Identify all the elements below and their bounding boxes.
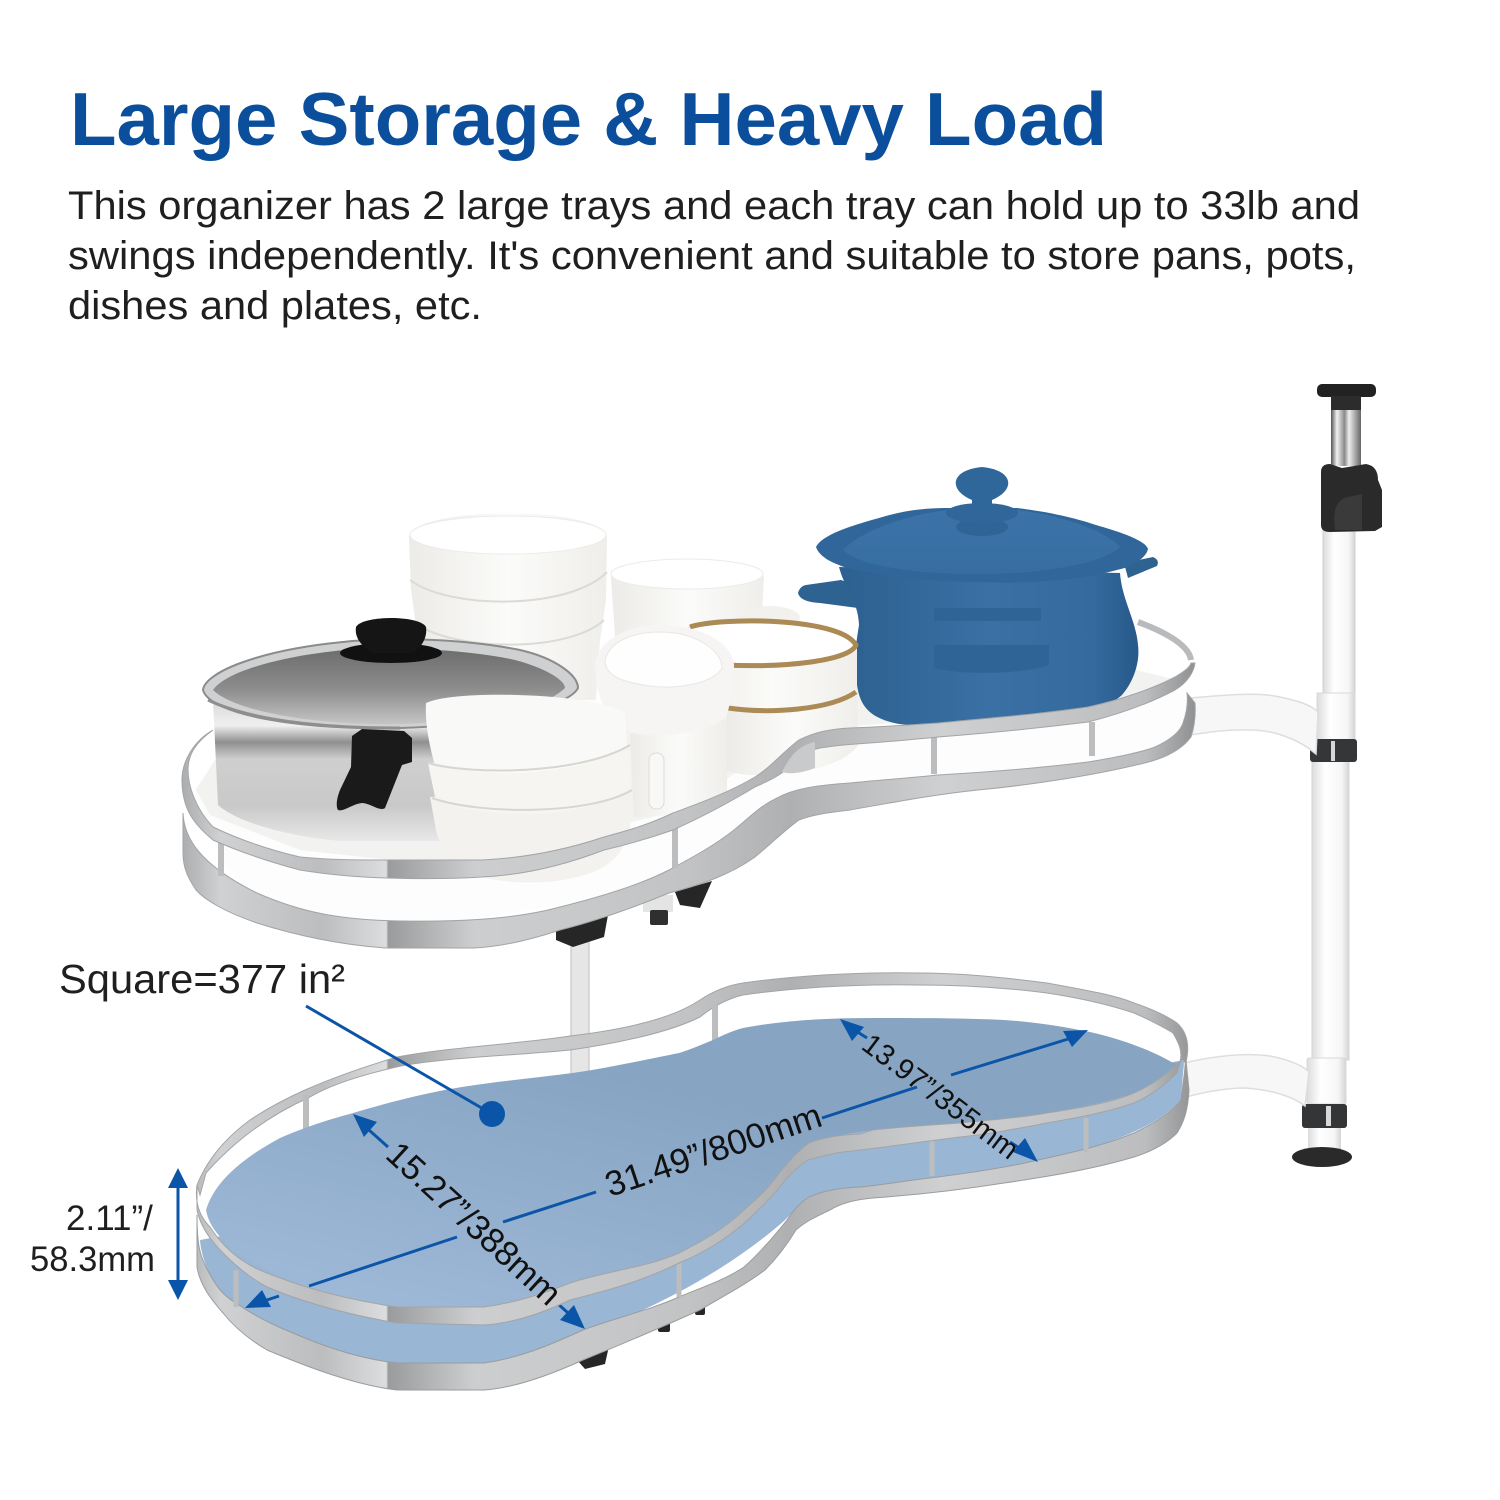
mug handle bbox=[649, 753, 664, 809]
gold rim bowls bbox=[688, 620, 858, 775]
bottom bowl bbox=[430, 790, 632, 882]
rear cup bbox=[611, 558, 764, 650]
lower rim band bbox=[197, 1060, 1189, 1390]
tilted cup bbox=[595, 625, 734, 735]
width arrow bottom left bbox=[560, 1305, 585, 1329]
width label right: 13.97”/355mm bbox=[856, 1028, 1024, 1166]
support pole bbox=[1292, 384, 1382, 1167]
blue pot bbox=[798, 467, 1158, 727]
lid dome bbox=[843, 510, 1120, 574]
callout leader bbox=[306, 1006, 492, 1114]
lower collar bbox=[1302, 1104, 1347, 1128]
rail band bbox=[182, 663, 1195, 879]
width arrow bottom right bbox=[1013, 1138, 1038, 1162]
small white dish behind bbox=[740, 606, 800, 630]
body reflections bbox=[934, 608, 1049, 673]
black clamp bbox=[1321, 464, 1382, 532]
center post bbox=[571, 940, 589, 1075]
bottom tube stub bbox=[1308, 1127, 1341, 1153]
description text: This organizer has 2 large trays and each tray can hold up to 33lb and bbox=[68, 184, 1360, 228]
length dimension line bbox=[252, 1036, 1078, 1305]
black handle bbox=[337, 729, 412, 810]
length arrow left bbox=[245, 1290, 271, 1308]
white mug and cup bbox=[595, 625, 734, 817]
back rail bbox=[197, 973, 1188, 1195]
white bolt bbox=[643, 895, 673, 912]
blue surface bbox=[206, 1018, 1181, 1307]
arrowheads bbox=[245, 1019, 1088, 1329]
lid collar bbox=[946, 503, 1018, 523]
steel saucepan bbox=[203, 618, 578, 841]
length label: 31.49”/800mm bbox=[600, 1096, 827, 1205]
pan body bbox=[213, 700, 470, 841]
white tray floor bbox=[186, 666, 1190, 930]
upper sleeve bbox=[1317, 693, 1355, 741]
upper arm bbox=[1190, 694, 1318, 754]
description text bbox=[68, 184, 1360, 328]
lower rim bbox=[728, 692, 856, 711]
upper tray hardware bbox=[556, 881, 712, 947]
chrome curve reflection bbox=[782, 742, 815, 773]
black bearing block bbox=[556, 915, 608, 947]
length arrow right bbox=[1063, 1030, 1088, 1047]
callout dot bbox=[479, 1101, 505, 1127]
height label bbox=[30, 1199, 155, 1279]
lower tray feet bbox=[570, 1305, 705, 1369]
lower arm bbox=[1184, 1055, 1309, 1106]
lid knob bbox=[356, 618, 426, 653]
lid rim bbox=[203, 639, 578, 728]
lid knob bbox=[956, 467, 1008, 512]
top foot cap bbox=[1317, 384, 1376, 410]
upper tray bbox=[183, 622, 1195, 948]
white upper tube bbox=[1323, 530, 1355, 695]
lower sleeve bbox=[1307, 1058, 1346, 1104]
front rail posts bbox=[236, 1118, 1086, 1307]
lower tray bbox=[196, 973, 1189, 1390]
width dimension left bbox=[360, 1122, 578, 1322]
rail posts bbox=[221, 722, 1092, 876]
upper rim bbox=[690, 621, 856, 666]
chrome upper rod bbox=[1331, 410, 1361, 466]
height dimension bbox=[168, 1168, 188, 1300]
width arrow top right bbox=[840, 1019, 864, 1041]
blue side fill bbox=[200, 1060, 1184, 1372]
rear rail end bbox=[1138, 622, 1191, 660]
right handle bbox=[1124, 557, 1158, 578]
front rail band bbox=[196, 1060, 1181, 1325]
bottom foot bbox=[1292, 1147, 1352, 1167]
dimension lines bbox=[252, 1006, 1078, 1322]
width arrow top left bbox=[353, 1114, 377, 1137]
stacked front bowls bbox=[426, 695, 632, 882]
pot body bbox=[839, 567, 1138, 727]
stacked white bowls bbox=[409, 513, 607, 700]
area label: Square=377 in² bbox=[59, 956, 345, 1002]
back rail posts bbox=[306, 1005, 715, 1135]
lower gold bowl bbox=[726, 690, 858, 775]
black bolt bbox=[650, 910, 668, 925]
middle collar bbox=[1310, 739, 1357, 762]
cup opening bbox=[605, 632, 722, 687]
width label left: 15.27”/388mm bbox=[379, 1135, 568, 1313]
width dimension right bbox=[848, 1026, 1030, 1155]
black clip bbox=[675, 881, 712, 908]
rim front line bbox=[208, 700, 400, 728]
top bowl bbox=[426, 695, 627, 773]
floor grey top bbox=[196, 670, 1176, 860]
description text: swings independently. It's convenient and suitable to store pans, pots, bbox=[68, 234, 1356, 278]
height label: 2.11”/ bbox=[66, 1199, 153, 1238]
upper tray rail bbox=[182, 663, 1195, 879]
mid bowl bbox=[428, 750, 630, 814]
title: Large Storage & Heavy Load bbox=[70, 77, 1107, 161]
upper gold bowl bbox=[688, 620, 857, 709]
height label: 58.3mm bbox=[30, 1240, 155, 1279]
description text: dishes and plates, etc. bbox=[68, 284, 482, 328]
collar reflection bbox=[956, 518, 1008, 536]
glass bbox=[213, 648, 565, 724]
mug body bbox=[630, 717, 727, 817]
lid knob disc bbox=[340, 643, 442, 663]
left handle bbox=[798, 580, 877, 610]
lid rim bbox=[816, 508, 1148, 583]
white lower tube bbox=[1312, 760, 1349, 1060]
front rim band bbox=[183, 693, 1195, 948]
